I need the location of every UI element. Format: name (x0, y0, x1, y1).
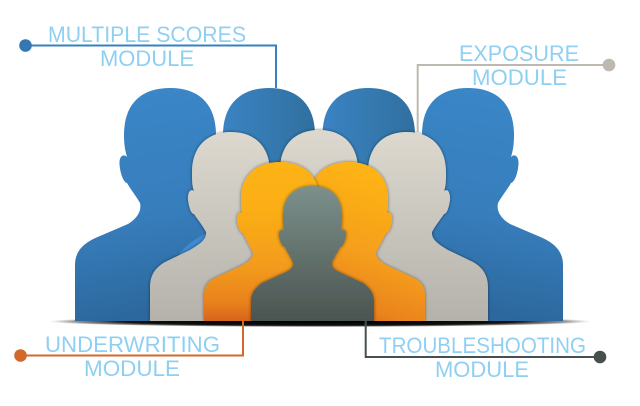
callout: troubleshooting module (366, 321, 606, 382)
blue shoulder crescent (176, 233, 209, 262)
left orange figure (204, 162, 356, 321)
callout: underwriting module: UNDERWRITING (45, 332, 220, 357)
left gray figure (150, 132, 312, 321)
middle gray figure (238, 130, 400, 321)
callout: multiple scores module (19, 22, 276, 88)
callout: multiple scores module: MODULE (100, 46, 194, 71)
callout: multiple scores module: MULTIPLE SCORES (48, 22, 246, 47)
callout: troubleshooting module: TROUBLESHOOTING (379, 333, 586, 358)
right orange figure (273, 162, 425, 321)
callout: exposure module (418, 41, 615, 132)
back blue figures (223, 88, 415, 321)
right blue figure (373, 88, 563, 321)
right gray figure (326, 132, 488, 321)
callout: troubleshooting module: MODULE (435, 357, 529, 382)
callout: exposure module: MODULE (472, 65, 567, 90)
callout: exposure module: EXPOSURE (459, 41, 579, 66)
callout: underwriting module (14, 321, 243, 381)
left blue figure (75, 88, 265, 321)
center dark figure (251, 186, 374, 321)
callout: underwriting module: MODULE (84, 356, 180, 381)
ground shadow (48, 316, 592, 327)
